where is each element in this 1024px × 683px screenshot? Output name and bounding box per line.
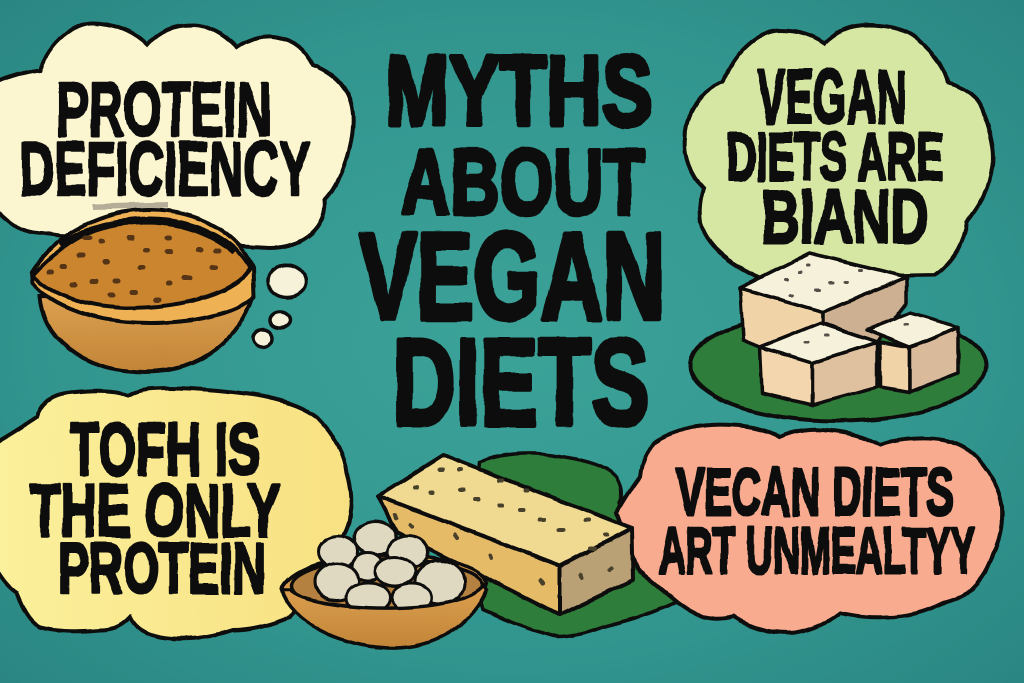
- thought cloud: [617, 425, 1002, 633]
- icon: bowl of lentils: [32, 205, 254, 372]
- icon: thought bubbles: [253, 265, 306, 347]
- heading: protein deficiency: PROTEIN: [56, 67, 272, 153]
- heading: tofu is the only protein: [30, 408, 280, 609]
- thought cloud: [685, 25, 993, 278]
- title: [359, 35, 665, 452]
- heading: vegan diets are bland: [726, 55, 944, 260]
- panel: protein deficiency: [0, 23, 353, 372]
- panel: tofu is the only protein: [0, 388, 351, 639]
- heading: vegan diets are bland: VEGAN: [757, 55, 907, 140]
- title: ABOUT: [400, 130, 646, 234]
- title: VEGAN: [359, 209, 665, 346]
- right tofu cube: [867, 313, 958, 392]
- large tofu cube: [740, 253, 907, 347]
- title: MYTHS: [386, 35, 652, 146]
- title: DIETS: [392, 315, 650, 452]
- icon: tofu on leaf plate: [690, 253, 986, 421]
- heading: protein deficiency: DEFICIENCY: [20, 127, 310, 212]
- panel: vegan diets are bland: [685, 25, 993, 421]
- icon: tofu block: [378, 455, 633, 615]
- thought cloud: [0, 388, 351, 639]
- icon: bowl of tofu balls: [282, 521, 487, 648]
- panel: vegan diets are unhealthy: [617, 425, 1002, 633]
- heading: tofu is the only protein: PROTEIN: [58, 530, 266, 609]
- front tofu cube: [760, 323, 877, 405]
- heading: vegan diets are unhealthy: [658, 454, 976, 587]
- heading: tofu is the only protein: THE ONLY: [30, 469, 280, 552]
- heading: protein deficiency: [20, 67, 310, 212]
- icon: green leaf under tofu block: [470, 453, 678, 637]
- heading: vegan diets are bland: BIAND: [762, 175, 928, 260]
- thought cloud: [0, 23, 353, 248]
- heading: tofu is the only protein: TOFH IS: [70, 408, 260, 491]
